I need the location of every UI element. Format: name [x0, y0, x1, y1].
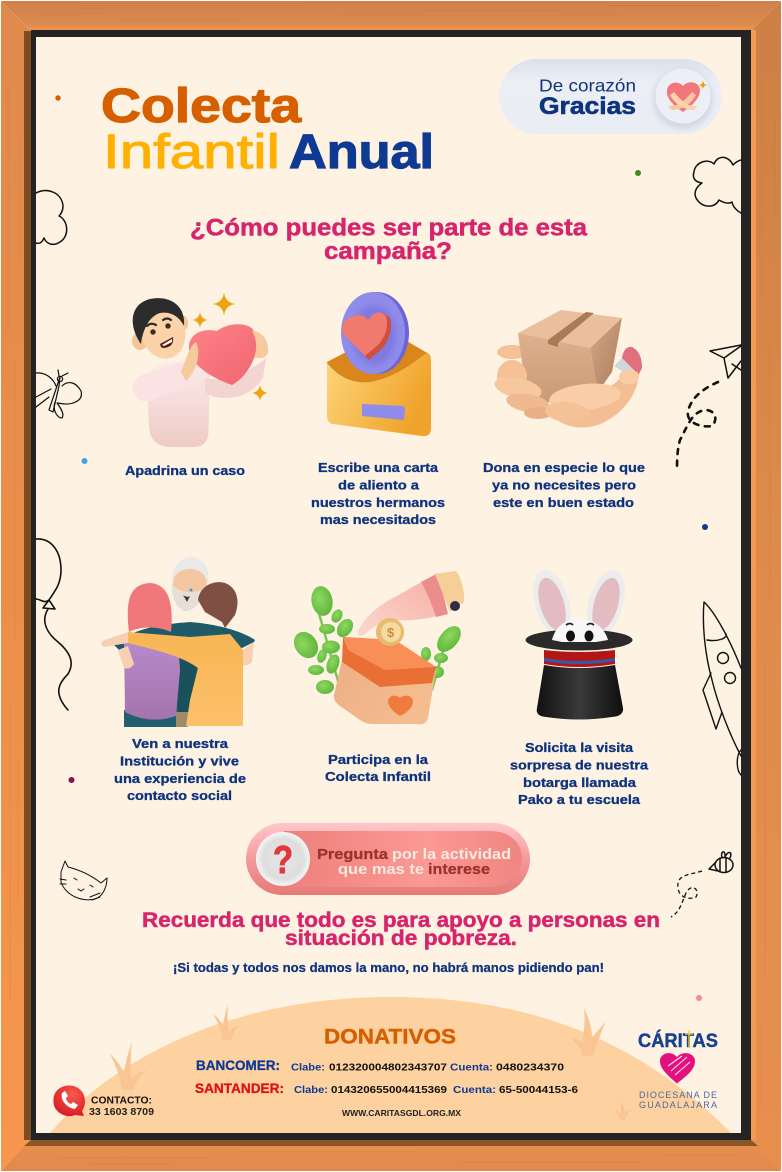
- caption: participa: [325, 752, 431, 784]
- heading: how to take part: ¿Cómo puedes ser parte de esta: [190, 214, 588, 242]
- doodle: butterfly: [36, 370, 81, 418]
- title: Colecta: [101, 80, 301, 133]
- caption: dona en especie: [483, 460, 645, 510]
- icon: heart hug: [667, 80, 708, 112]
- caption: escribe una carta: de aliento a: [338, 478, 420, 492]
- caption: participa: Colecta Infantil: [325, 769, 431, 784]
- caption: solicita la visita: Pako a tu escuela: [518, 792, 641, 807]
- doodle: rocket: [703, 602, 741, 775]
- decorative grass tufts: [110, 1004, 632, 1120]
- doodle: left cloud: [36, 191, 67, 244]
- bank row: Bancomer: Clabe:: [291, 1062, 325, 1074]
- callout button: pregunta: interese: [428, 861, 490, 878]
- logo: Cáritas Diocesana de Guadalajara: DIOCESANA DE: [639, 1090, 717, 1100]
- icon: phone bubble: [53, 1086, 85, 1116]
- caption: dona en especie: Dona en especie lo que: [483, 460, 645, 475]
- caption: ven a nuestra institución: Institución y vive: [120, 754, 239, 768]
- logo: Cáritas Diocesana de Guadalajara: CÁRITAS: [638, 1030, 718, 1052]
- callout button: pregunta: Pregunta: [317, 846, 389, 863]
- bank row: Santander: 65-50044153-6: [499, 1084, 578, 1096]
- caption: participa: Participa en la: [328, 752, 429, 767]
- doodle: balloon: [36, 539, 71, 710]
- caption: ven a nuestra institución: [114, 736, 246, 803]
- contact block: 33 1603 8709: [89, 1106, 154, 1118]
- doodle: bee with dashed trail: [671, 852, 733, 917]
- icon: donation box with coin and leaves: $: [387, 625, 395, 640]
- badge: De corazón Gracias: [499, 59, 722, 134]
- bank row: Santander: Cuenta:: [453, 1084, 496, 1096]
- caption: ven a nuestra institución: Ven a nuestra: [132, 736, 229, 751]
- doodle: paper plane with dashed trail: [677, 345, 741, 472]
- bank row: Santander: [195, 1081, 578, 1096]
- caption: apadrina: Apadrina un caso: [125, 463, 245, 478]
- icon: heart with hands: [660, 1053, 695, 1084]
- bank row: Santander: Clabe:: [294, 1084, 328, 1096]
- callout button: pregunta: por la actividad: [392, 846, 511, 863]
- title: Infantil: [103, 126, 280, 179]
- caption: solicita la visita: sorpresa de nuestra: [510, 758, 649, 772]
- icon: top hat with rabbit: [526, 566, 632, 720]
- website: WWW.CARITASGDL.ORG.MX: [342, 1108, 461, 1118]
- title: [101, 80, 434, 179]
- caption: dona en especie: ya no necesites pero: [492, 478, 636, 492]
- logo: Cáritas Diocesana de Guadalajara: GUADALAJARA: [639, 1100, 717, 1110]
- icon: question mark: ?: [273, 839, 293, 882]
- caption: escribe una carta: mas necesitados: [320, 512, 436, 527]
- doodle: right cloud: [693, 157, 741, 213]
- footer hill: [50, 997, 731, 1133]
- caption: ven a nuestra institución: una experiencia de: [114, 771, 246, 786]
- bank row: Bancomer: 0480234370: [496, 1062, 564, 1074]
- icon: envelope with heart: [327, 292, 431, 436]
- caption: dona en especie: este en buen estado: [493, 495, 634, 510]
- doodle: cat: [60, 861, 107, 900]
- contact block: CONTACTO:: [91, 1094, 152, 1106]
- caption: escribe una carta: [311, 460, 445, 527]
- caption: escribe una carta: Escribe una carta: [318, 460, 439, 475]
- heading: how to take part: campaña?: [324, 238, 452, 265]
- icon: hands holding box: [492, 310, 642, 427]
- icon: group hug: [101, 557, 255, 727]
- bank row: Bancomer: BANCOMER:: [196, 1058, 280, 1073]
- caption: solicita la visita: botarga llamada: [523, 775, 637, 790]
- message: recuerda: Recuerda que todo es para apoyo a personas en: [142, 908, 660, 932]
- bank row: Santander: SANTANDER:: [195, 1081, 284, 1096]
- accent dots: [55, 95, 708, 1001]
- message: recuerda: [142, 908, 660, 950]
- bank row: Bancomer: Cuenta:: [450, 1062, 493, 1074]
- icon: question mark: [256, 832, 310, 886]
- callout button: pregunta: [246, 823, 530, 895]
- logo: Cáritas Diocesana de Guadalajara: [638, 1030, 718, 1110]
- bank row: Bancomer: [196, 1058, 564, 1074]
- slogan: ¡Si todas y todos nos damos la mano, no habrá manos pidiendo pan!: [173, 961, 604, 975]
- callout button: pregunta: que mas te: [338, 861, 424, 878]
- bank row: Santander: 014320655004415369: [331, 1084, 447, 1096]
- badge: De corazón Gracias: Gracias: [539, 93, 636, 120]
- caption: escribe una carta: nuestros hermanos: [311, 495, 445, 510]
- caption: solicita la visita: Solicita la visita: [525, 740, 634, 755]
- message: recuerda: situación de pobreza.: [285, 926, 517, 950]
- badge: De corazón Gracias: De corazón: [539, 76, 636, 96]
- icon: man hugging heart: [132, 292, 268, 447]
- caption: ven a nuestra institución: contacto social: [127, 788, 232, 803]
- donations heading: DONATIVOS: [324, 1026, 456, 1048]
- title: Anual: [289, 126, 434, 179]
- heading: how to take part: [190, 214, 588, 265]
- caption: solicita la visita: [510, 740, 649, 807]
- icon: donation box with coin and leaves: [289, 571, 466, 724]
- bank row: Bancomer: 012320004802343707: [329, 1062, 447, 1074]
- contact block: [53, 1086, 154, 1118]
